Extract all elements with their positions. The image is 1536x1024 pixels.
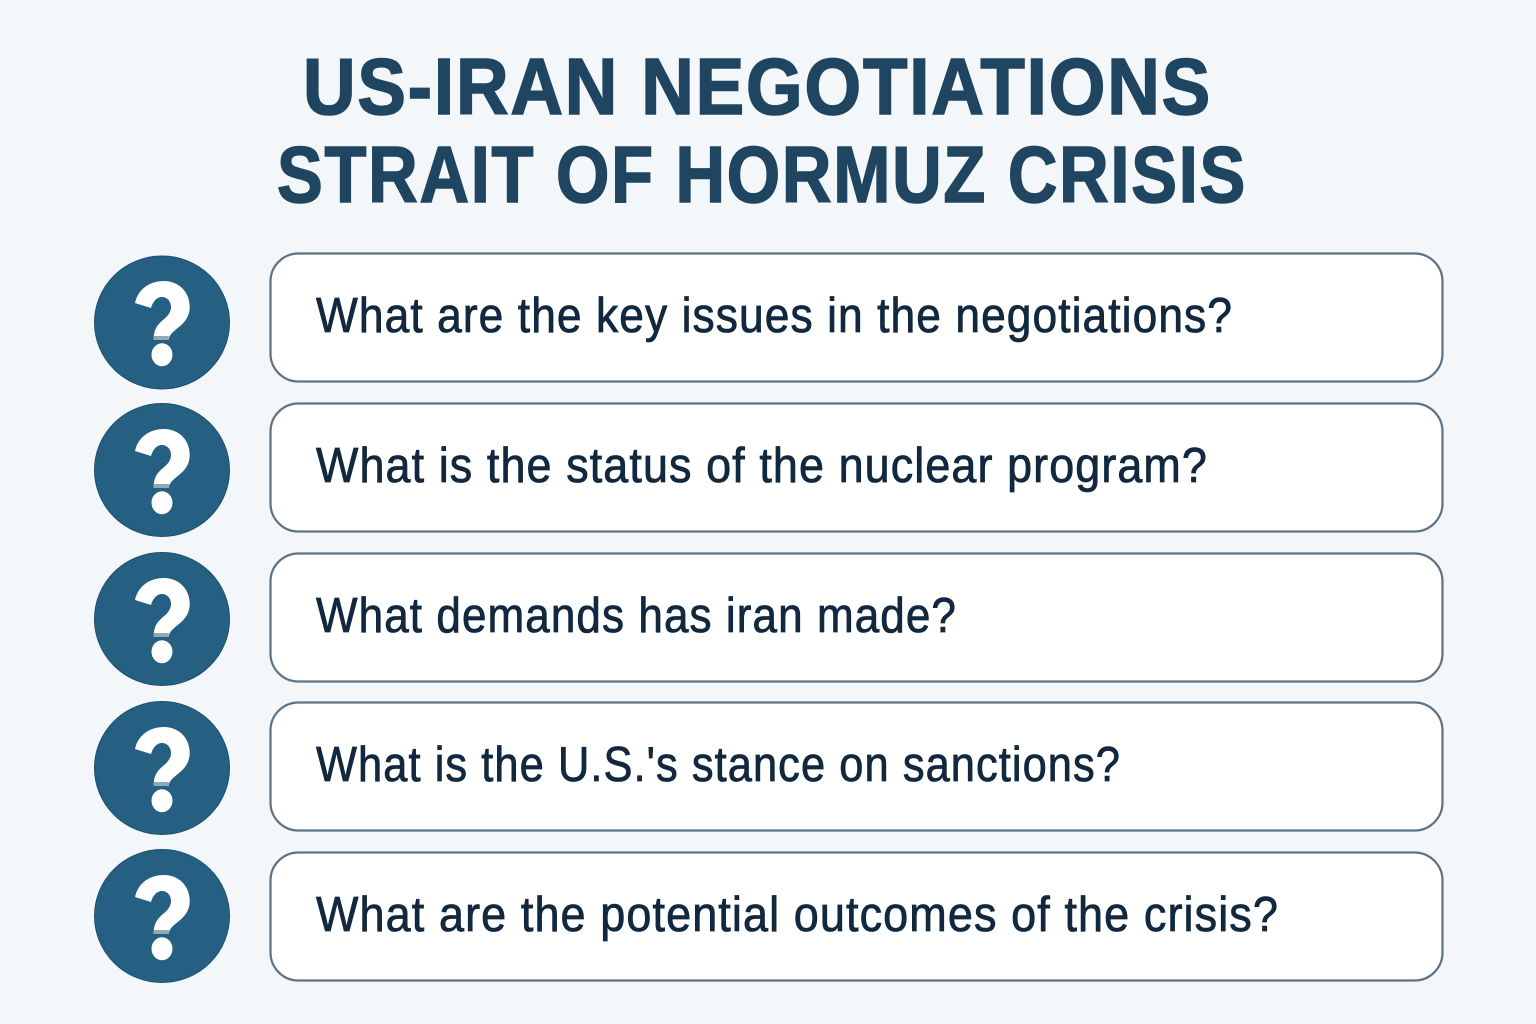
card: potential outcomes: What are the potential outcomes of the crisis?	[316, 888, 1279, 942]
question row 4	[94, 702, 1442, 834]
card: sanctions stance: What is the U.S.'s stance on sanctions?	[316, 738, 1121, 792]
card: nuclear program: What is the status of the nuclear program?	[316, 439, 1208, 493]
title	[277, 42, 1247, 219]
card: nuclear program	[270, 404, 1442, 532]
title: STRAIT OF HORMUZ CRISIS	[277, 130, 1247, 219]
question row 5	[94, 850, 1442, 982]
question row 3	[94, 552, 1442, 686]
question row 2	[94, 404, 1442, 536]
icon: question mark 5	[94, 850, 230, 982]
card: Iran demands: What demands has iran made?	[316, 589, 957, 643]
card: sanctions stance	[270, 702, 1442, 830]
card: Iran demands	[270, 554, 1442, 682]
card: potential outcomes	[270, 852, 1442, 980]
icon: question mark 4	[94, 702, 230, 834]
card: key issues: What are the key issues in the negotiations?	[316, 289, 1233, 343]
card: key issues	[270, 254, 1442, 382]
question row 1	[94, 254, 1442, 389]
icon: question mark 3	[94, 552, 230, 686]
icon: question mark 2	[94, 404, 230, 536]
icon: question mark 1	[94, 256, 230, 389]
title: US-IRAN NEGOTIATIONS	[303, 42, 1212, 131]
